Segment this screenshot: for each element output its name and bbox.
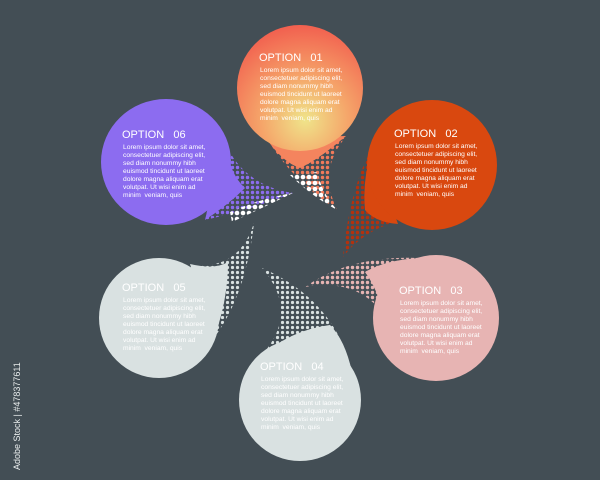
bubble 04: OPTION 04 xyxy=(260,361,324,373)
bubble 05: minim veniam, quis xyxy=(123,345,183,352)
bubble 03: Lorem ipsum dolor sit amet, xyxy=(400,300,483,307)
bubble 06: consectetuer adipiscing elit, xyxy=(123,152,205,159)
bubble 02: dolore magna aliquam erat xyxy=(395,175,475,182)
bubble 04 xyxy=(239,268,361,461)
bubble 02: volutpat. Ut wisi enim ad xyxy=(395,183,468,190)
bubble 05 xyxy=(99,223,254,378)
bubble 02: minim veniam, quis xyxy=(395,191,455,198)
bubble 01: dolore magna aliquam erat xyxy=(260,99,340,106)
bubble 06: OPTION 06 xyxy=(122,129,186,141)
bubble 06 xyxy=(101,99,293,225)
bubble 06: volutpat. Ut wisi enim ad xyxy=(123,184,196,191)
bubble 01: euismod tincidunt ut laoreet xyxy=(260,91,342,98)
bubble 01 xyxy=(237,25,363,210)
bubble 04: sed diam nonummy hibh xyxy=(261,392,334,399)
bubble 06: dolore magna aliquam erat xyxy=(123,176,203,183)
bubble 01: Lorem ipsum dolor sit amet, xyxy=(260,67,343,74)
bubble 01: minim veniam, quis xyxy=(260,115,320,122)
bubble 05: dolore magna aliquam erat xyxy=(123,329,203,336)
bubble 03: consectetuer adipiscing elit, xyxy=(400,308,482,315)
bubble 04: euismod tincidunt ut laoreet xyxy=(261,400,343,407)
bubble 04: consectetuer adipiscing elit, xyxy=(261,384,343,391)
bubble 02: consectetuer adipiscing elit, xyxy=(395,151,477,158)
bubble 04: minim veniam, quis xyxy=(261,424,321,431)
bubble 01: OPTION 01 xyxy=(259,52,323,64)
bubble 05: sed diam nonummy hibh xyxy=(123,313,196,320)
bubble 04: volutpat. Ut wisi enim ad xyxy=(261,416,334,423)
bubble 03: minim veniam, quis xyxy=(400,348,460,355)
bubble 06: euismod tincidunt ut laoreet xyxy=(123,168,205,175)
bubble 02: OPTION 02 xyxy=(394,128,458,140)
bubble 03: euismod tincidunt ut laoreet xyxy=(400,324,482,331)
side credit text: Adobe Stock | #478377611 xyxy=(12,362,22,470)
bubble 02 xyxy=(343,100,497,257)
bubble 01: sed diam nonummy hibh xyxy=(260,83,333,90)
bubble 05: volutpat. Ut wisi enim ad xyxy=(123,337,196,344)
bubble 02: euismod tincidunt ut laoreet xyxy=(395,167,477,174)
bubble 04: dolore magna aliquam erat xyxy=(261,408,341,415)
bubble 03: dolore magna aliquam erat xyxy=(400,332,480,339)
bubble 04: Lorem ipsum dolor sit amet, xyxy=(261,376,344,383)
bubble 01: volutpat. Ut wisi enim ad xyxy=(260,107,333,114)
bubble 05: consectetuer adipiscing elit, xyxy=(123,305,205,312)
bubble 05: OPTION 05 xyxy=(122,282,186,294)
bubble 03: volutpat. Ut wisi enim ad xyxy=(400,340,473,347)
bubble 06: sed diam nonummy hibh xyxy=(123,160,196,167)
bubble 01: consectetuer adipiscing elit, xyxy=(260,75,342,82)
bubble 06: minim veniam, quis xyxy=(123,192,183,199)
bubble 05: Lorem ipsum dolor sit amet, xyxy=(123,297,206,304)
bubble 06: Lorem ipsum dolor sit amet, xyxy=(123,144,206,151)
bubble 02: Lorem ipsum dolor sit amet, xyxy=(395,143,478,150)
bubble 02: sed diam nonummy hibh xyxy=(395,159,468,166)
bubble 03: sed diam nonummy hibh xyxy=(400,316,473,323)
bubble 03: OPTION 03 xyxy=(399,285,463,297)
bubble 03 xyxy=(305,255,499,381)
bubble 05: euismod tincidunt ut laoreet xyxy=(123,321,205,328)
